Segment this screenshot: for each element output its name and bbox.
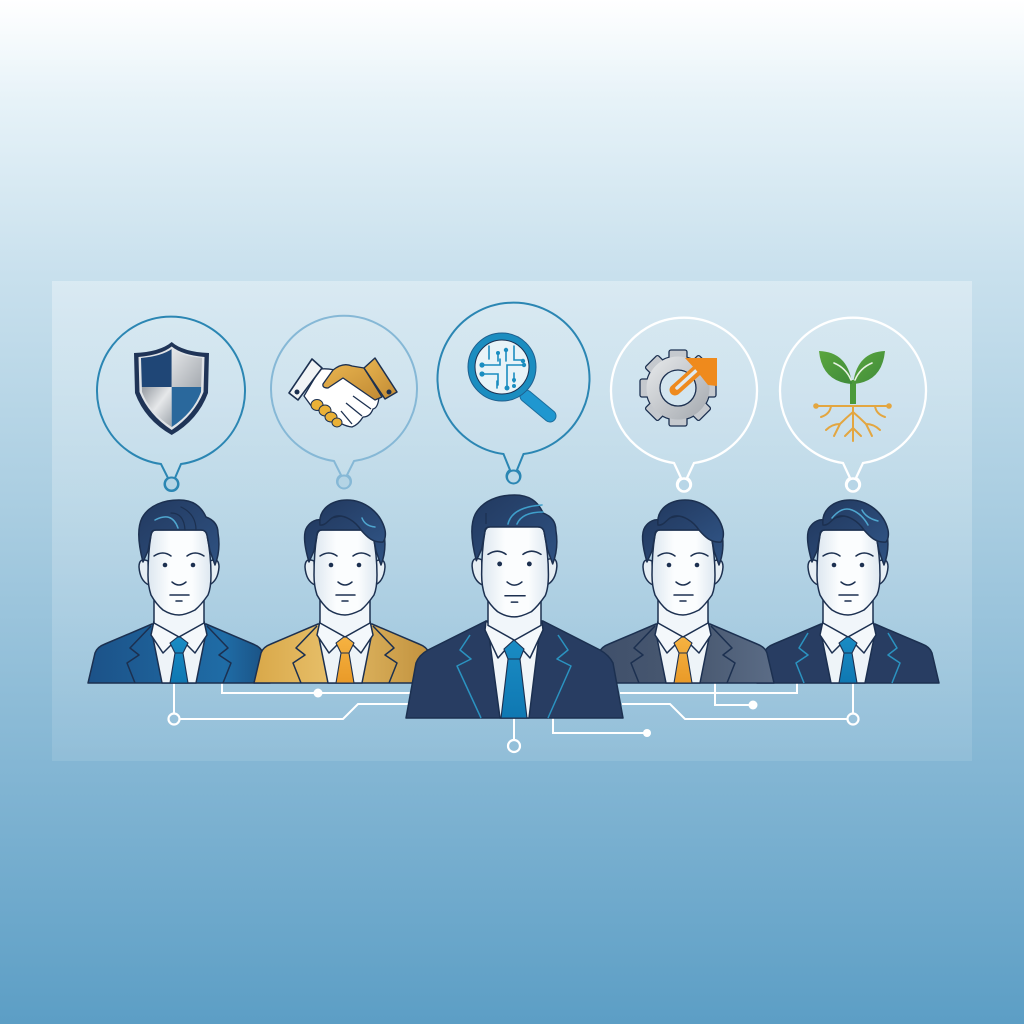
icon: shield — [134, 342, 209, 435]
person 3: centre figure, navy suit, blue tie — [406, 495, 623, 718]
person 2: gold suit, orange tie — [254, 500, 436, 683]
icon: magnifying glass — [468, 333, 550, 416]
icon: handshake — [289, 358, 397, 427]
circuit connector lines — [168, 683, 858, 752]
speech bubble: security shield — [97, 317, 245, 491]
person 4: gray suit, orange tie — [592, 500, 774, 683]
icon: gear with orange arrow — [640, 350, 717, 426]
speech bubble: gear and arrow — [611, 318, 757, 492]
icon: plant — [813, 351, 892, 441]
person 5: navy suit, blue tie — [757, 500, 939, 683]
translucent central panel — [52, 281, 972, 761]
speech bubble: seedling with roots — [780, 318, 926, 492]
speech bubble: magnifier with circuit — [438, 303, 590, 484]
person 1: blue suit, blue tie — [88, 500, 270, 683]
speech bubble: handshake — [271, 316, 417, 488]
